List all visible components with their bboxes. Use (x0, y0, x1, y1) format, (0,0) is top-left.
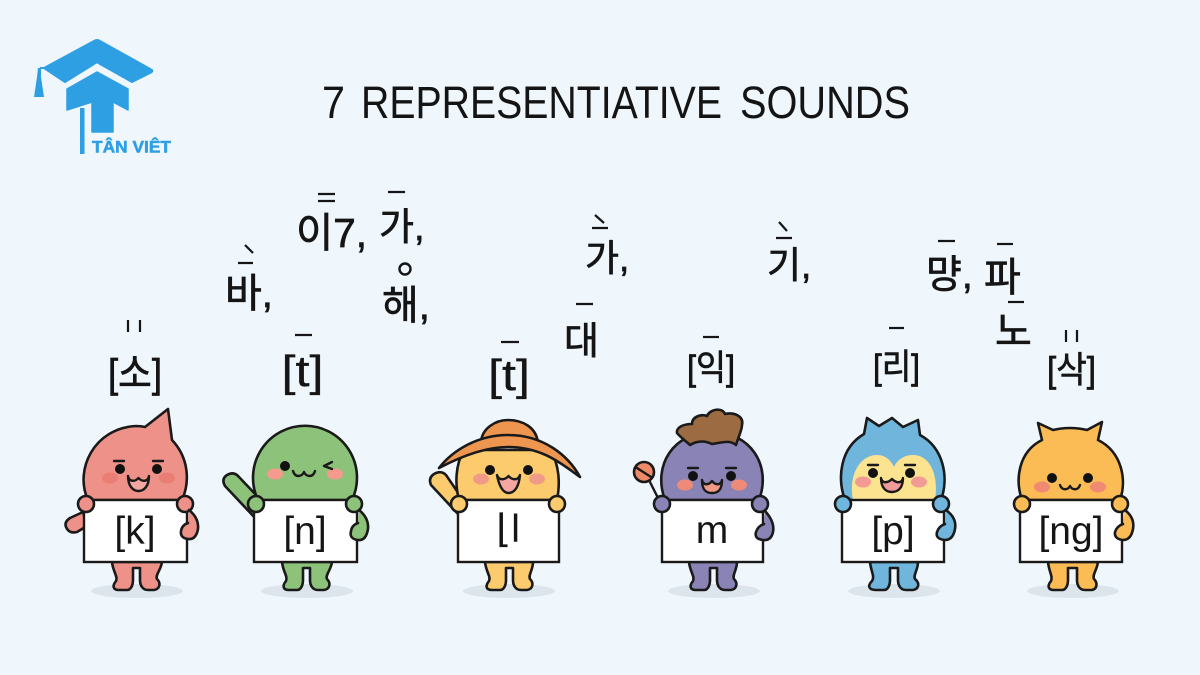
example syllable: 대: 대 (564, 321, 599, 363)
example syllable: 해: 해, (382, 284, 430, 328)
character: red [k]: [k] (114, 510, 156, 553)
example syllable: 먕: 먕, (926, 254, 973, 297)
pronunciation: [리]: [리] (873, 348, 920, 387)
pronunciation: [익]: [익] (687, 349, 735, 388)
title: 7 (322, 77, 345, 128)
example syllable: 가: 가, (379, 207, 425, 249)
example syllables for [k] [n] column: 바 (225, 245, 273, 316)
title: REPRESENTIATIVE (361, 77, 722, 128)
pronunciation: [삭] (1047, 330, 1096, 390)
example syllable: 기: 기, (767, 245, 811, 286)
example syllable: grave marked 가 (585, 215, 629, 279)
character: orange cat [ng] (1014, 422, 1133, 598)
example syllable: 이7: 이7, (296, 210, 367, 256)
pronunciation: [소]: [소] (108, 352, 162, 396)
logo: Tân Việt graduation cap and arrow (34, 40, 171, 156)
character: red [k] (66, 409, 198, 598)
character: green [n] (223, 426, 368, 598)
pronunciation: [리] (873, 328, 920, 387)
example syllable: 노: 노 (995, 310, 1032, 354)
example syllable: grave marked 가: 가, (585, 238, 629, 279)
character: orange cat [ng]: [ng] (1038, 510, 1104, 553)
logo: Tân Việt graduation cap and arrow: TÂN VIÊT (92, 138, 171, 156)
pronunciation: [t] under l column: [t] (488, 351, 530, 400)
title: SOUNDS (740, 77, 910, 128)
pronunciation: [t] under n column: [t] (282, 347, 324, 396)
example syllable: 기 (767, 222, 811, 286)
character: yellow [l] with hat: ⌊l (496, 508, 520, 551)
character: blue [p] (835, 418, 955, 598)
character: purple m with lollipop (634, 410, 773, 598)
character: green [n]: [n] (283, 510, 327, 553)
example syllable: 파: 파 (984, 256, 1021, 300)
pronunciation: [삭]: [삭] (1047, 349, 1096, 390)
example syllables for [k] [n] column: 바: 바, (225, 272, 273, 316)
character: blue [p]: [p] (871, 510, 915, 553)
character: purple m with lollipop: m (696, 509, 728, 552)
example syllable: 해 (382, 264, 430, 328)
character: yellow [l] with hat (430, 420, 580, 598)
pronunciation: [소] (108, 320, 162, 396)
